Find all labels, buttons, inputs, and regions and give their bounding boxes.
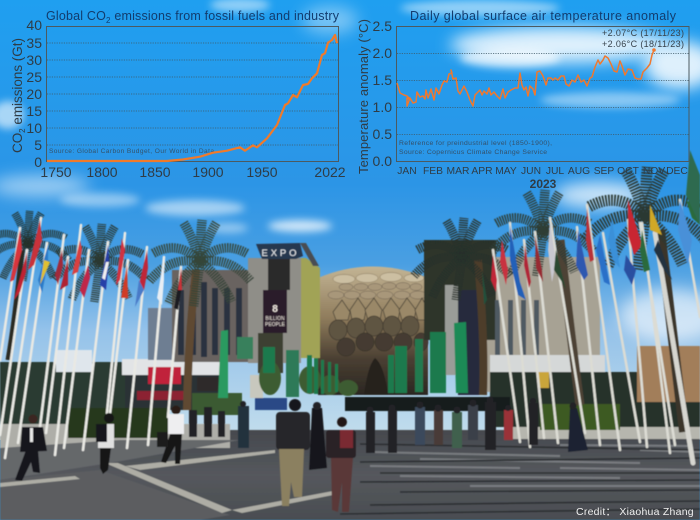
chart title: Global CO bbox=[46, 9, 106, 23]
source note: Source: Global Carbon Budget, Our World in Data bbox=[49, 148, 214, 155]
month labels: OCT bbox=[617, 166, 640, 177]
y axis labels: 2.5 bbox=[373, 18, 392, 34]
chart title: emissions from fossil fuels and industry bbox=[111, 9, 340, 23]
month labels: AUG bbox=[568, 166, 590, 177]
year label: 2023 bbox=[530, 177, 557, 191]
y axis labels bbox=[373, 18, 392, 169]
right building with palm bbox=[424, 240, 700, 430]
panel: CO2 emissions chart bbox=[10, 9, 346, 180]
peak annotations bbox=[602, 28, 684, 49]
month labels: APR bbox=[471, 166, 493, 177]
source note: Reference for preindustrial level (1850-1900), bbox=[399, 140, 552, 147]
flags left bbox=[10, 220, 182, 310]
month labels bbox=[397, 166, 688, 177]
source note bbox=[399, 140, 552, 156]
EXPO tower bbox=[248, 243, 320, 410]
chart title: Daily global surface air temperature anomaly bbox=[410, 9, 677, 23]
y axis labels: 30 bbox=[26, 52, 42, 68]
y axis labels: 40 bbox=[26, 17, 42, 33]
green banners bbox=[218, 322, 468, 398]
y axis labels: 2.0 bbox=[373, 45, 392, 61]
street trees bbox=[259, 361, 358, 396]
y axis title: CO bbox=[10, 133, 25, 153]
y axis labels: 0 bbox=[34, 154, 42, 170]
x axis labels: 2022 bbox=[314, 164, 346, 180]
thick foreground pole bbox=[655, 233, 693, 463]
flag poles left bbox=[0, 218, 181, 458]
x axis labels: 1950 bbox=[246, 164, 278, 180]
x axis labels: 1750 bbox=[40, 164, 72, 180]
EXPO sign: EXPO bbox=[262, 248, 296, 259]
month labels: DEC bbox=[666, 166, 688, 177]
crowd bbox=[189, 396, 588, 470]
plot frame and gridlines bbox=[396, 26, 689, 162]
peak annotations: +2.06°C (18/11/23) bbox=[602, 39, 684, 49]
month labels: NOV bbox=[643, 166, 665, 177]
mid-rise building bbox=[148, 270, 254, 362]
y axis labels: 20 bbox=[26, 86, 42, 102]
y axis labels: 10 bbox=[26, 120, 42, 136]
paving stripe bbox=[0, 450, 333, 513]
y axis title: 2 bbox=[18, 128, 27, 133]
y axis labels: 1.5 bbox=[373, 72, 392, 88]
source note: Source: Copernicus Climate Change Service bbox=[399, 149, 547, 156]
pedestrians foreground bbox=[15, 399, 356, 512]
month labels: FEB bbox=[423, 166, 443, 177]
x axis labels: 1850 bbox=[139, 164, 171, 180]
plot frame and gridlines bbox=[46, 26, 338, 162]
panel: temperature anomaly chart bbox=[356, 9, 689, 191]
y axis labels: 0.0 bbox=[373, 153, 392, 169]
y axis title: emissions (Gt) bbox=[10, 38, 25, 128]
chart title: 2 bbox=[106, 16, 111, 25]
x axis labels: 1800 bbox=[86, 164, 118, 180]
peak marker bbox=[652, 48, 656, 52]
y axis labels: 1.0 bbox=[373, 99, 392, 115]
clouds bbox=[0, 0, 700, 341]
month labels: JUL bbox=[546, 166, 564, 177]
y axis labels bbox=[26, 17, 42, 170]
peak annotations: +2.07°C (17/11/23) bbox=[602, 28, 684, 38]
y axis labels: 25 bbox=[26, 69, 42, 85]
temperature line bbox=[397, 50, 654, 106]
month labels: SEP bbox=[594, 166, 614, 177]
x axis labels: 1900 bbox=[192, 164, 224, 180]
y axis labels: 15 bbox=[26, 103, 42, 119]
month labels: MAR bbox=[447, 166, 469, 177]
dome pavilion bbox=[318, 266, 428, 395]
flags right bbox=[482, 150, 700, 305]
credit: Credit： Xiaohua Zhang bbox=[576, 506, 694, 518]
y axis labels: 5 bbox=[34, 137, 42, 153]
month labels: MAY bbox=[495, 166, 517, 177]
ground plaza bbox=[0, 424, 700, 520]
people caption: PEOPLE bbox=[265, 322, 286, 328]
billion people caption: BILLION bbox=[265, 316, 285, 322]
billion people sign: 8 bbox=[272, 304, 278, 315]
street scene bbox=[0, 150, 700, 520]
month labels: JUN bbox=[521, 166, 541, 177]
palm trees bbox=[0, 167, 700, 432]
y axis title: Temperature anomaly (°C) bbox=[356, 19, 371, 174]
flag poles right bbox=[493, 200, 700, 453]
x axis labels bbox=[40, 164, 346, 180]
emissions line bbox=[47, 35, 337, 161]
background trees and low white buildings bbox=[0, 350, 242, 438]
month labels: JAN bbox=[397, 166, 417, 177]
y axis labels: 0.5 bbox=[373, 126, 392, 142]
y axis labels: 35 bbox=[26, 35, 42, 51]
